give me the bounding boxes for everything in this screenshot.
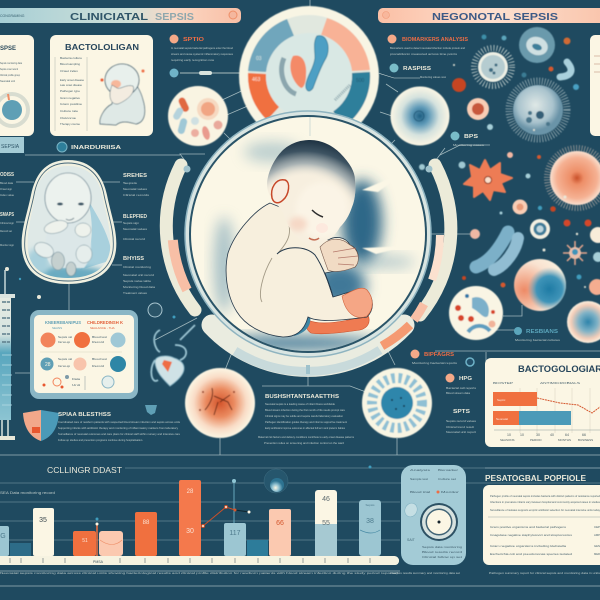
bar chart: 51 xyxy=(82,538,88,544)
text block: disease label right xyxy=(388,34,469,56)
panel: bactogologiar chart xyxy=(485,358,600,447)
text block: disease label right: procalcitonin measured across time points xyxy=(390,52,458,56)
label: bipfagrs: Monitoring bacterial reports xyxy=(412,361,458,365)
side labels right: BHYISS xyxy=(123,256,145,262)
side labels right: Neonatal values xyxy=(123,227,148,231)
chart footnote: Neonatal sepsis monitoring data across clinical units showing bacteriological results and clinical profile distribution for newborn patients with blood stream infection during the study period reported xyxy=(0,571,398,575)
panel: bactogologiar chart: Neonatal xyxy=(496,417,508,421)
heading: neonatal sepsis: NEGONOTAL SEPSIS xyxy=(432,12,558,23)
panel: bactogologiar chart: BIOSTEP xyxy=(493,381,513,385)
hand xyxy=(320,239,358,271)
heading: chart title: CCLLINGR DDAST xyxy=(47,466,122,475)
panel: left card: Neonatal unit xyxy=(0,79,15,83)
side labels right: SREHES xyxy=(123,173,148,179)
panel: bacteriologic card with baby: Gram positive xyxy=(60,102,82,106)
label: resbians: Monitoring bacterial cultures xyxy=(515,338,561,342)
side labels right: Treatment values xyxy=(123,291,148,295)
label: bipfagrs: BIPFAGRS xyxy=(424,352,455,358)
panel: profile card: CEP xyxy=(594,525,600,529)
text block: sptio: In neonatal sepsis bacterial pathogens enter the blood xyxy=(171,46,233,50)
text block: sptio: requiring early recognition now xyxy=(171,58,215,62)
fetus baby xyxy=(32,173,92,276)
organ blue xyxy=(306,36,328,91)
text block: hpg: HPG xyxy=(459,376,472,382)
blue sphere xyxy=(514,259,566,311)
panel: device card: Sepsis data monitoring xyxy=(422,545,462,549)
panel: bacteriologic card with baby: Blood sampling xyxy=(60,62,80,66)
panel: device card: Culture set xyxy=(438,477,456,481)
band caps xyxy=(184,166,432,374)
text block: hpg xyxy=(446,374,477,395)
outer band arcs xyxy=(166,165,451,371)
side labels left: Onset sign xyxy=(0,187,12,191)
icon: probe xyxy=(170,68,240,78)
text block: spts: Clinical trend result xyxy=(446,425,474,429)
heading: BACTOGOLOGIAR xyxy=(518,364,600,374)
panel: bacteriologic card with baby: Culture rate xyxy=(60,109,78,113)
panel: bactogologiar chart: 64 xyxy=(565,433,569,437)
icon: syringe xyxy=(0,267,15,440)
panel: info card: Group xyxy=(58,340,70,344)
side labels right: Neonatal unit record xyxy=(123,273,154,277)
side labels right xyxy=(123,173,155,295)
label: bipfagrs xyxy=(410,350,458,365)
panel: device card: Biomarker xyxy=(438,468,458,472)
line series xyxy=(202,479,250,528)
text block: central paragraph: BUSHSHTANTSAAETTHS xyxy=(265,394,340,400)
gauge: top ring: 500 xyxy=(356,78,365,84)
side labels left: Monitor sign xyxy=(0,243,14,247)
bar chart xyxy=(0,479,399,565)
blue virus circle xyxy=(362,368,432,438)
panel: device card: Analysis xyxy=(410,468,431,472)
text block: spiaa blesthss: Follow-up studies and prevention programs continue during hospitalisation. xyxy=(58,438,143,442)
small dots xyxy=(452,78,466,92)
side labels right: Clinical record xyxy=(123,237,145,241)
gauge segment teal xyxy=(333,72,370,127)
orange star cell xyxy=(464,160,512,200)
panel: bacteriologic card with baby: Outcome xyxy=(60,116,76,120)
text block: central paragraph: Prevention relies on screening and infection control on the ward xyxy=(264,441,344,445)
panel: bacteriologic card with baby: Pathogen type xyxy=(60,89,80,93)
panel: info card: Data xyxy=(72,377,80,381)
spiky cell xyxy=(474,48,512,86)
toes xyxy=(342,288,372,317)
panel: profile card xyxy=(483,485,600,565)
panel: left card: Clinical profile group xyxy=(0,73,20,77)
panel: clinical sepsis header xyxy=(0,8,241,23)
panel: bacteriologic card with baby: Onset index xyxy=(60,69,79,73)
text block: spts xyxy=(446,409,477,434)
text block: central paragraph: Maternal risk factors and delivery conditions contribute to early onset disease patterns xyxy=(258,435,354,439)
icon: shield xyxy=(23,410,59,441)
blue radial circle xyxy=(390,86,450,146)
blue star xyxy=(563,241,587,265)
dot xyxy=(368,466,372,468)
panel: device card: Blood results record xyxy=(422,550,462,554)
fetus capsule xyxy=(20,160,120,290)
header tag: CONGRAMING xyxy=(0,14,25,18)
panel: device card xyxy=(401,465,466,565)
text block: spiaa blesthss: SPIAA BLESTHSS xyxy=(58,412,112,418)
side labels right: BLEPFIED xyxy=(123,214,147,220)
heading: bactololigan: BACTOLOLIGAN xyxy=(65,43,139,52)
panel: bactogologiar chart: 40 xyxy=(550,433,554,437)
gauge: top ring: 463 xyxy=(252,77,261,83)
side labels right: Monitoring blood data xyxy=(123,285,155,289)
spot sphere xyxy=(449,286,503,340)
text block: spiaa blesthss xyxy=(58,412,180,442)
side labels right: Sepsis sign xyxy=(123,221,139,225)
panel: bactogologiar chart: Septic xyxy=(497,398,506,402)
text block: spiaa blesthss: Surveillance of neonatal outcomes and care plans for clinical staff within nursery and intensive care xyxy=(58,432,180,436)
icon: small shell xyxy=(145,405,157,415)
text block: spiaa blesthss: Supporting infants with antibiotic therapy and monitoring of inflammatory markers from laboratory xyxy=(58,426,178,430)
text block: raspiss: Monitoring values now xyxy=(420,75,447,79)
panel: info card: Sepsis val xyxy=(58,357,72,361)
panel: info card: Record xyxy=(92,340,104,344)
panel: bacteriologic card with baby xyxy=(50,35,153,136)
panel: bacteriologic card with baby: Late onset disease xyxy=(60,83,82,87)
ring dial xyxy=(420,503,458,541)
disc cell xyxy=(519,27,555,63)
head xyxy=(267,140,356,240)
right edge card xyxy=(590,35,600,136)
panel: left card xyxy=(0,35,34,136)
bar chart: 55 xyxy=(322,520,330,527)
gauge segment peach xyxy=(321,18,370,71)
heading: clinical sepsis: CLINICIATAL xyxy=(70,12,148,23)
bar chart: 30 xyxy=(186,528,194,535)
panel: device card: Clinical follow up set xyxy=(422,555,462,559)
panel: profile card: Escherichia coli and pseudomonas species isolated xyxy=(490,552,572,556)
bacteria circle xyxy=(168,86,228,146)
bars xyxy=(0,526,9,556)
side labels left: SMAPS xyxy=(0,212,15,218)
bar chart: 46 xyxy=(322,496,330,503)
diaper xyxy=(294,316,310,336)
label: bps: BPS xyxy=(464,134,479,140)
large spiky cell xyxy=(509,81,567,139)
text block: spts: Sepsis record values xyxy=(446,419,477,423)
text block: central paragraph: Blood stream infection during the first month of life needs prompt care xyxy=(265,408,345,412)
panel: device card: Sample test xyxy=(410,477,428,481)
ear xyxy=(272,180,289,203)
bar chart: 88 xyxy=(143,520,150,526)
side labels left: Index value xyxy=(0,193,14,197)
panel: left card: Sepsis monitoring data xyxy=(0,61,22,65)
text block: central paragraph: Pathogen identification guides therapy and informs supportive treatment xyxy=(265,420,347,424)
panel: device card: SAIT xyxy=(407,538,416,542)
panel: neonatal sepsis header xyxy=(378,8,600,23)
panel: info card: Unit xyxy=(72,383,80,387)
text block: central paragraph: Neonatal sepsis is a leading cause of infant illness worldwide xyxy=(265,402,335,406)
bar chart: Sepsis xyxy=(365,503,375,507)
baby figure xyxy=(226,135,372,337)
panel: info card: Group xyxy=(58,364,70,368)
text block: raspiss xyxy=(378,64,447,79)
side labels right: Sepsis value table xyxy=(123,279,151,283)
small teal dots xyxy=(458,162,466,168)
panel: profile card: Gram positive organisms and bacterial pathogens xyxy=(490,525,567,529)
text block: sptio: SPTIO xyxy=(183,37,204,43)
panel: bacteriologic card with baby: Bacteria culture xyxy=(60,56,82,60)
panel: info card xyxy=(30,310,138,399)
tab: sepsia xyxy=(0,137,24,153)
icon: header dot right xyxy=(382,12,390,18)
text block: disease label right: BIOMARKERS ANALYSIS xyxy=(402,37,469,43)
side labels left: ODISS xyxy=(0,172,15,178)
panel: info card: Blood test xyxy=(92,335,107,339)
axis band xyxy=(0,556,399,565)
gauge: top ring: 03 xyxy=(256,56,262,62)
side labels left: Clinical sign xyxy=(0,221,14,225)
panel: info card: Blood test xyxy=(92,357,107,361)
scattered dots xyxy=(564,220,570,226)
panel: device card: Monitor xyxy=(441,490,459,494)
text block: hpg: Blood stream data xyxy=(446,391,470,395)
panel: left card: SPSE xyxy=(0,46,16,52)
tab: sepsia: SEPSIA xyxy=(1,144,20,150)
icon: ball xyxy=(264,469,288,493)
foot back xyxy=(306,315,369,334)
bar chart: 117 xyxy=(229,530,241,537)
bar chart: G xyxy=(0,533,6,540)
panel: bactogologiar chart: 10 xyxy=(520,433,524,437)
text block: central paragraph: Clinical signs may be subtle and require careful laboratory evaluation xyxy=(265,414,343,418)
panel: bactogologiar chart: BUSINESS xyxy=(578,438,593,442)
side labels left: Blood data xyxy=(0,181,13,185)
panel: bactogologiar chart: 10 xyxy=(507,433,511,437)
panel: bactogologiar chart: 30 xyxy=(536,433,540,437)
label: resbians: RESBIANS xyxy=(526,329,559,335)
icon: heart jellyfish xyxy=(151,325,195,386)
label: inarduriisa xyxy=(57,142,122,152)
bar chart: 28 xyxy=(187,489,194,495)
right sphere xyxy=(567,301,600,343)
panel: bacteriologic card with baby: Gram negative xyxy=(60,96,80,100)
panel: info card: SEANS xyxy=(52,326,62,330)
icon: header dot xyxy=(229,11,237,19)
side labels right: Clinical records xyxy=(123,193,150,197)
panel: profile card: Gram negative organisms including klebsiella xyxy=(490,544,566,548)
eye xyxy=(312,210,323,217)
panel: bactogologiar chart: ANTIMICROBIALS xyxy=(540,381,580,385)
panel: central baby circle xyxy=(185,111,431,357)
gauge inner disc xyxy=(266,33,352,119)
peach cell xyxy=(467,98,489,120)
text block: spts: Neonatal unit report xyxy=(446,430,476,434)
text block: central paragraph xyxy=(258,394,354,445)
bar chart: PMSA xyxy=(93,560,104,564)
bar chart: 38 xyxy=(366,518,374,525)
icon: small baby xyxy=(100,64,145,125)
label: inarduriisa: INARDURIISA xyxy=(71,145,122,151)
panel: bacteriologic card with baby: Therapy course xyxy=(60,122,80,126)
panel: info card: Sepsis val xyxy=(58,335,72,339)
side labels left xyxy=(0,172,15,247)
text block: spiaa blesthss: Coordinated care of newborn patients with suspected blood stream infection and sepsis across units xyxy=(58,420,180,424)
marker xyxy=(96,518,98,556)
panel: bactogologiar chart: MONTHS xyxy=(558,438,571,442)
red circle xyxy=(185,368,255,438)
bar chart: 66 xyxy=(276,520,284,527)
gauge segment orange xyxy=(248,73,279,120)
pathogens field xyxy=(419,27,600,343)
gauge: top ring xyxy=(239,6,379,146)
side labels right: Sepsis xyxy=(123,181,138,185)
ring cell xyxy=(530,219,550,239)
panel: bactogologiar chart: 66 xyxy=(582,433,586,437)
heading: pesatogbal popfiole: PESATOGBAL POPFIOLE xyxy=(485,474,587,483)
side labels right: Neonatal values xyxy=(123,187,148,191)
panel: device card: Blood trial xyxy=(410,490,430,494)
small pill xyxy=(386,557,399,565)
panel: left card: Sepsis onset record xyxy=(0,67,18,71)
panel: info card: KNEEREBANIPUS xyxy=(45,320,81,325)
heading: sepsis: SEPSIS xyxy=(155,12,194,23)
panel: info card: SEALANCE - THA xyxy=(90,326,115,330)
panel: info card: CHILDREDINSH K xyxy=(87,320,124,325)
panel: info card: 28 xyxy=(45,362,51,368)
text block: spts: SPTS xyxy=(453,409,471,415)
double bacilli xyxy=(476,232,518,270)
panel: bacteriologic card with baby: Early onset disease xyxy=(60,78,84,82)
body xyxy=(226,203,372,337)
text block: central paragraph: Early antibiotics improve outcomes in affected full term and preterm babies xyxy=(265,426,345,430)
chart label: SEA Data monitoring record xyxy=(0,491,55,495)
panel: bactogologiar chart: SEASONS xyxy=(500,438,515,442)
panel: profile card: Coagulase negative staphylococci and streptococcus xyxy=(490,533,573,537)
side labels right: Clinical monitoring xyxy=(123,265,151,269)
label: bps: Monitoring cases xyxy=(453,143,485,147)
text block: raspiss: RASPISS xyxy=(403,66,432,72)
footnote right: Analysis results summary and monitoring data set xyxy=(390,571,460,575)
bacillus capsule xyxy=(560,62,571,77)
label: bps xyxy=(450,132,485,147)
icon: ring xyxy=(148,303,162,317)
nose and mouth xyxy=(316,223,328,233)
text block: sptio xyxy=(170,34,233,62)
chart: gridlines xyxy=(0,468,600,540)
side labels left: Record set xyxy=(0,229,12,233)
panel: bactogologiar chart: PERIOD xyxy=(530,438,542,442)
icon: ring dot xyxy=(466,358,474,366)
small dots left xyxy=(19,278,175,318)
footnote right xyxy=(390,571,600,575)
text block: disease label right: Biomarkers used to detect neonatal infection include protein and xyxy=(390,46,465,50)
label: resbians xyxy=(514,327,561,342)
large orange cell xyxy=(547,148,600,208)
text block: sptio: stream and cause systemic inflammatory responses xyxy=(171,52,233,56)
panel: info card: Record xyxy=(92,364,104,368)
bar values: 35 xyxy=(39,517,47,524)
footnote right: Pathogen summary report for clinical sepsis and monitoring data in units xyxy=(489,571,600,575)
gauge segment blue xyxy=(248,19,294,72)
text block: hpg: Bacterial cell reports xyxy=(446,386,477,390)
body creases xyxy=(260,217,290,302)
